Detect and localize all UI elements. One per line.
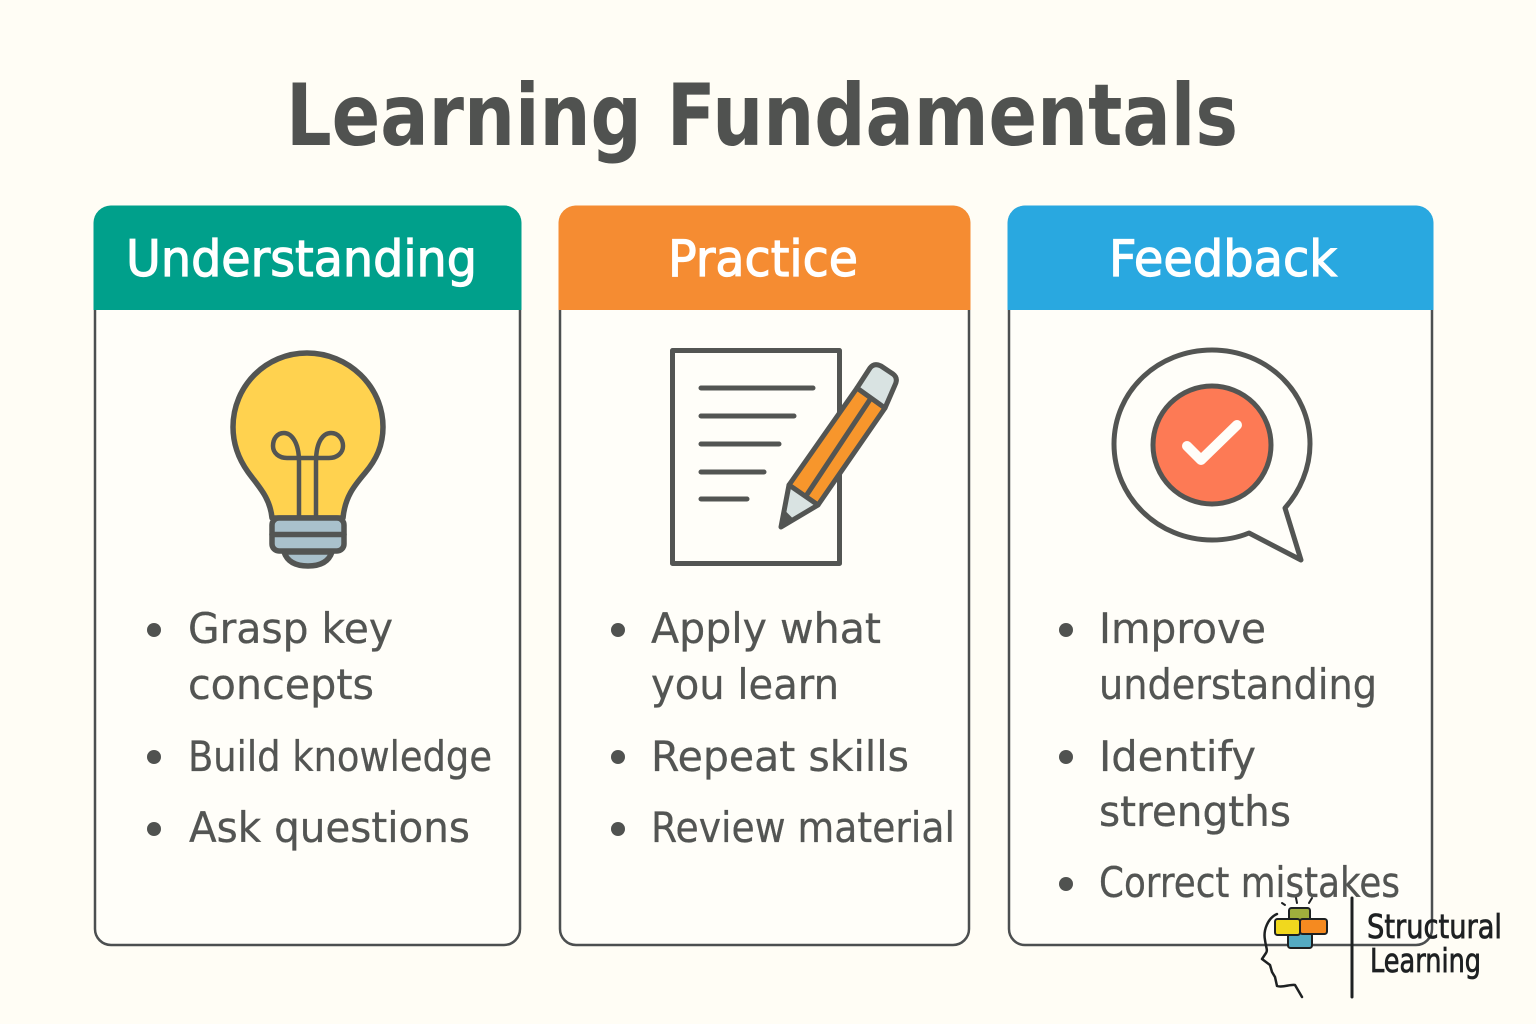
logo text: Learning bbox=[1370, 941, 1481, 980]
logo divider bbox=[1350, 898, 1354, 997]
icon: speech bubble with check bbox=[1114, 350, 1310, 560]
header: understanding: Understanding bbox=[126, 230, 477, 288]
bullet list: understanding bbox=[147, 604, 492, 852]
header: feedback bbox=[1008, 206, 1434, 310]
logo icon: head with bricks bbox=[1262, 898, 1327, 997]
panel: feedback bbox=[1008, 206, 1434, 945]
logo text: Structural bbox=[1367, 907, 1502, 946]
icon: light bulb bbox=[233, 353, 383, 566]
header: understanding bbox=[94, 206, 522, 310]
bullet list: feedback: Improve bbox=[1099, 604, 1266, 653]
bullet list: understanding: concepts bbox=[188, 660, 374, 709]
logo: structural learning bbox=[1262, 898, 1502, 997]
bullet list: feedback: understanding bbox=[1099, 660, 1377, 709]
bullet list: understanding: Ask questions bbox=[189, 803, 470, 852]
bullet list: feedback: Correct mistakes bbox=[1099, 858, 1400, 907]
panel: understanding bbox=[94, 206, 522, 945]
header: practice bbox=[558, 206, 970, 310]
icon: document and pencil bbox=[672, 350, 896, 564]
bullet list: practice: Repeat skills bbox=[651, 732, 909, 781]
logo text bbox=[1367, 907, 1502, 980]
bullet list: feedback: strengths bbox=[1099, 787, 1291, 836]
title: Learning Fundamentals bbox=[286, 66, 1238, 166]
card body bbox=[95, 207, 520, 945]
bullet list: feedback: Identify bbox=[1099, 732, 1256, 781]
header: practice: Practice bbox=[668, 230, 858, 288]
bullet list: practice bbox=[611, 604, 955, 852]
bullet list: practice: Review material bbox=[651, 803, 955, 852]
card body bbox=[560, 207, 969, 945]
header: feedback: Feedback bbox=[1109, 230, 1337, 288]
card body bbox=[1009, 207, 1432, 945]
bullet list: understanding: Build knowledge bbox=[188, 732, 492, 781]
bullet list: practice: you learn bbox=[651, 660, 839, 709]
bullet list: understanding: Grasp key bbox=[188, 604, 393, 653]
bullet list: feedback bbox=[1059, 604, 1400, 907]
bullet list: practice: Apply what bbox=[651, 604, 881, 653]
panel: practice bbox=[558, 206, 970, 945]
